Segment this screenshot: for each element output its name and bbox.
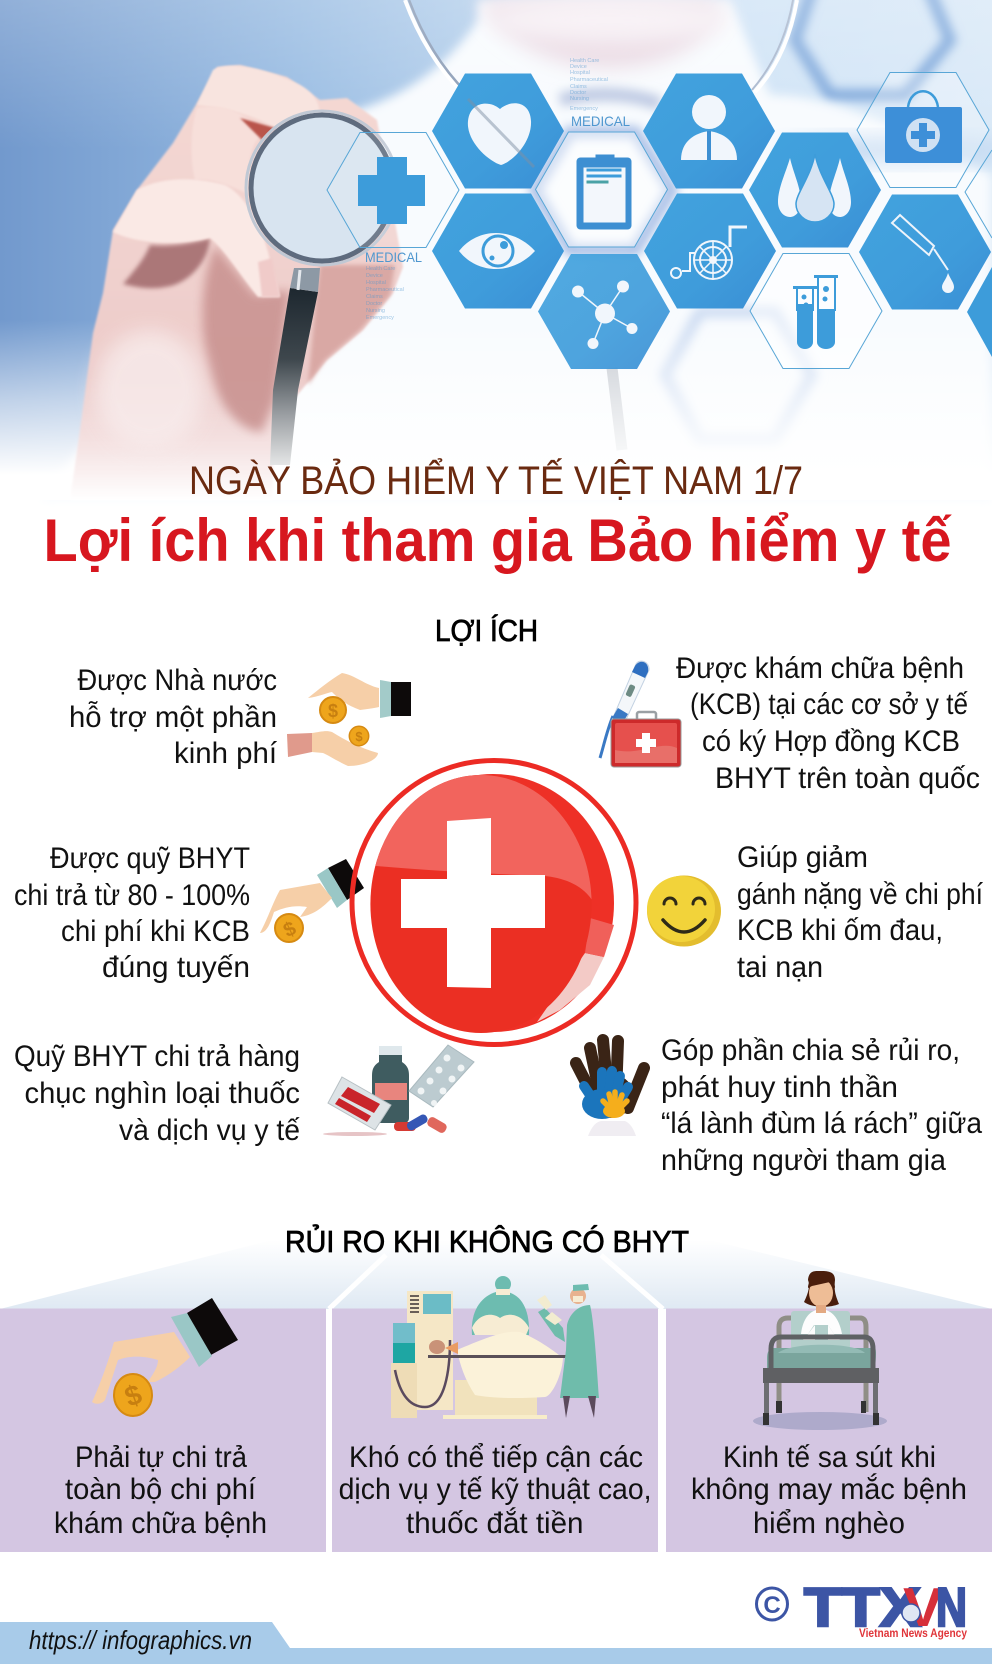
- icon: hands giving coins: $: [355, 729, 363, 744]
- text: hospital access: BHYT trên toàn quốc: [715, 762, 980, 795]
- panel: pay everything: [0, 1298, 326, 1552]
- text: [691, 1441, 967, 1540]
- icon: medicines: [323, 1045, 474, 1136]
- label: medical top: Nursing: [570, 96, 589, 102]
- label: medical left: Claims: [366, 294, 383, 300]
- text: fund pays: chi trả từ 80 - 100%: [14, 879, 250, 912]
- icon: hand with coin: $: [280, 917, 300, 942]
- text: medicines: [14, 1040, 300, 1147]
- hero photo: doctor with stethoscope: [0, 0, 992, 500]
- text: state support: hỗ trợ một phần: [69, 701, 277, 734]
- label: medical top: Hospital: [570, 70, 590, 76]
- text: reduce burden: [737, 841, 984, 984]
- logo: TTXVN: C: [763, 1592, 781, 1619]
- text: fund pays: Được quỹ BHYT: [50, 842, 250, 875]
- hexagon: test tubes: [750, 254, 882, 368]
- panel: high-tech services: [332, 1276, 658, 1552]
- hexagon: cross: [327, 132, 459, 248]
- icon: three hands: [576, 1040, 644, 1136]
- label: medical top: [570, 58, 630, 129]
- label: medical top: Claims: [570, 84, 587, 90]
- text: khám chữa bệnh: [54, 1507, 267, 1540]
- text: reduce burden: KCB khi ốm đau,: [737, 914, 943, 947]
- text: Khó có thể tiếp cận các: [349, 1441, 643, 1474]
- logo: TTXVN: TTX: [804, 1576, 921, 1638]
- stethoscope tubes at top: [405, 0, 797, 450]
- icon: hand with coin large: [92, 1298, 238, 1416]
- text: reduce burden: Giúp giảm: [737, 841, 868, 874]
- text: thuốc đắt tiền: [406, 1507, 584, 1540]
- hero bottom fade: [0, 0, 992, 500]
- label: medical top: Doctor: [570, 90, 586, 96]
- text: [339, 1441, 652, 1540]
- text: state support: Được Nhà nước: [78, 664, 277, 697]
- text: sharing risk: những người tham gia: [661, 1144, 946, 1177]
- label: medical left: [365, 249, 422, 321]
- label: medical left: Nursing: [366, 308, 385, 314]
- label: medical left: Health Care: [366, 266, 395, 272]
- logo: TTXVN: V: [903, 1576, 943, 1638]
- icon: thermometer and first-aid kit: [600, 661, 681, 767]
- title: main: Lợi ích khi tham gia Bảo hiểm y tế: [44, 507, 952, 574]
- text: hospital access: có ký Hợp đồng KCB: [702, 725, 960, 758]
- label: medical top: MEDICAL: [571, 113, 630, 129]
- hexagon: drops: [749, 132, 881, 248]
- text: toàn bộ chi phí: [65, 1473, 257, 1506]
- hexagon: syringe: [859, 194, 991, 310]
- label: medical left: Pharmaceutical: [366, 287, 404, 293]
- hexagon: eye: [432, 194, 564, 308]
- text: fund pays: đúng tuyến: [102, 951, 250, 984]
- label: medical top: Health Care: [570, 58, 599, 64]
- stethoscope head: [246, 111, 398, 265]
- text: không may mắc bệnh: [691, 1473, 967, 1506]
- hexagon: partial right filled: [967, 267, 992, 357]
- text: fund pays: [14, 842, 250, 984]
- white coat: [40, 0, 992, 500]
- text: dịch vụ y tế kỹ thuật cao,: [339, 1473, 652, 1506]
- text: medicines: Quỹ BHYT chi trả hàng: [14, 1040, 300, 1073]
- icon: smiley: [647, 876, 721, 946]
- text: Phải tự chi trả: [75, 1441, 247, 1474]
- text: [54, 1441, 267, 1540]
- icon: hand with coin large: $: [121, 1378, 146, 1413]
- logo: TTXVN: N: [936, 1576, 967, 1638]
- roof shape above risk panels: [0, 1240, 992, 1309]
- text: fund pays: chi phí khi KCB: [61, 915, 250, 948]
- icon: hand with coin: [260, 859, 364, 942]
- text: sharing risk: [661, 1034, 982, 1177]
- heading: benefits: LỢI ÍCH: [435, 613, 538, 648]
- label: medical top: Emergency: [570, 106, 598, 112]
- text: sharing risk: phát huy tinh thần: [661, 1071, 898, 1104]
- hexagon: wheelchair: [644, 194, 776, 308]
- hexagon: person: [643, 74, 775, 188]
- text: medicines: chục nghìn loại thuốc: [24, 1077, 300, 1110]
- label: medical left: Device: [366, 273, 383, 279]
- label: medical left: Doctor: [366, 301, 382, 307]
- chin and neck: [480, 0, 720, 68]
- hand: [70, 65, 403, 500]
- logo: TTXVN: [756, 1576, 967, 1640]
- text: hiểm nghèo: [753, 1507, 905, 1540]
- icon: hands giving coins: [287, 673, 411, 766]
- text: Kinh tế sa sút khi: [723, 1441, 936, 1474]
- text: state support: [69, 664, 278, 770]
- text: state support: kinh phí: [174, 737, 278, 770]
- text: sharing risk: Góp phần chia sẻ rủi ro,: [661, 1034, 960, 1067]
- label: medical top: Device: [570, 64, 587, 70]
- label: medical top: Pharmaceutical: [570, 77, 608, 83]
- icon: hands giving coins: $: [328, 701, 338, 721]
- text: hospital access: [676, 652, 980, 795]
- logo: TTXVN: Vietnam News Agency: [859, 1626, 967, 1640]
- hero background: [0, 0, 992, 500]
- icon: surgery: [391, 1276, 599, 1419]
- footer url: https:// infographics.vn: [29, 1625, 252, 1655]
- hexagon: network: [538, 254, 670, 369]
- icon: patient in bed: [753, 1271, 887, 1430]
- label: medical left: Hospital: [366, 280, 386, 286]
- label: medical left: MEDICAL: [365, 249, 422, 265]
- stethoscope stem: [270, 268, 320, 465]
- blurred stethoscope ring top right: [795, 0, 950, 95]
- title: day: NGÀY BẢO HIỂM Y TẾ VIỆT NAM 1/7: [189, 456, 803, 503]
- heading: risks: RỦI RO KHI KHÔNG CÓ BHYT: [285, 1223, 689, 1259]
- hexagon: heart: [432, 74, 564, 188]
- footer bar: [0, 1622, 992, 1664]
- blurred rings in foreground coat: [535, 94, 812, 440]
- hexagon: clipboard: [536, 132, 668, 247]
- badge: red cross button: [352, 760, 636, 1044]
- label: medical left: Emergency: [366, 315, 394, 321]
- text: reduce burden: tai nạn: [737, 951, 823, 984]
- hexagon: medical bag: [857, 72, 989, 188]
- text: medicines: và dịch vụ y tế: [119, 1114, 300, 1147]
- hexagon: partial right outline: [965, 150, 992, 238]
- text: hospital access: Được khám chữa bệnh: [676, 652, 964, 685]
- panel: economic decline: [666, 1271, 992, 1552]
